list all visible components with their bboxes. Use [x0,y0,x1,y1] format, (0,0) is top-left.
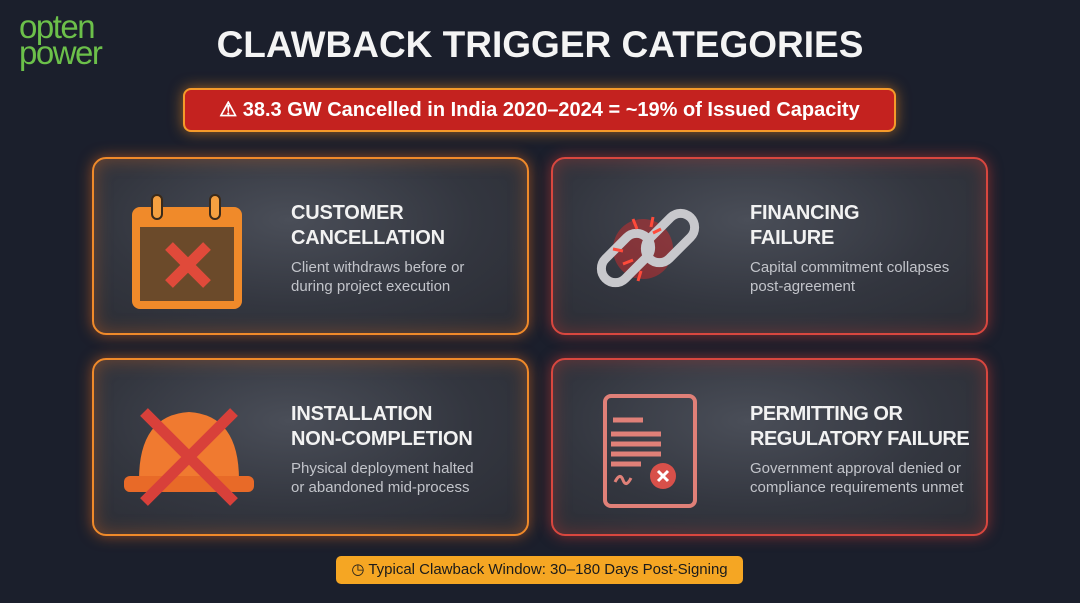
icon: calendar with x [132,194,242,309]
panel: financing failure: post-agreement [750,278,855,295]
banner: stat: ⚠ 38.3 GW Cancelled in India 2020–2024 = ~19% of Issued Capacity [219,99,860,121]
logo [19,8,102,71]
panel: installation non-completion: or abandoned mid-process [291,479,469,496]
panel: financing failure [551,157,988,335]
panel: financing failure: FAILURE [750,227,834,249]
icon: document with x seal [603,394,697,508]
logo: opten [19,8,94,45]
panel: installation non-completion: NON-COMPLETION [291,428,473,450]
panel: customer cancellation: CANCELLATION [291,227,445,249]
panel: permitting or regulatory failure: Government approval denied or [750,460,961,477]
panel: installation non-completion [92,358,529,536]
badge: clawback window: ◷ Typical Clawback Window: 30–180 Days Post-Signing [351,561,728,578]
panel: permitting or regulatory failure: REGULATORY FAILURE [750,428,969,450]
banner: stat [183,88,896,132]
panel: permitting or regulatory failure: PERMITTING OR [750,403,902,425]
panel: customer cancellation: during project execution [291,278,450,295]
panel: customer cancellation: CUSTOMER [291,202,403,224]
icon: broken chain [596,208,700,288]
panel: customer cancellation: Client withdraws before or [291,259,464,276]
panel: permitting or regulatory failure [551,358,988,536]
logo: power [19,34,101,71]
icon: hard hat with x [124,408,254,506]
panel: permitting or regulatory failure: compliance requirements unmet [750,479,963,496]
panel: financing failure: FINANCING [750,202,859,224]
title: CLAWBACK TRIGGER CATEGORIES [217,24,863,65]
panel: customer cancellation [92,157,529,335]
panel: installation non-completion: Physical deployment halted [291,460,474,477]
badge: clawback window [336,556,743,584]
panel: installation non-completion: INSTALLATION [291,403,432,425]
panel: financing failure: Capital commitment collapses [750,259,949,276]
